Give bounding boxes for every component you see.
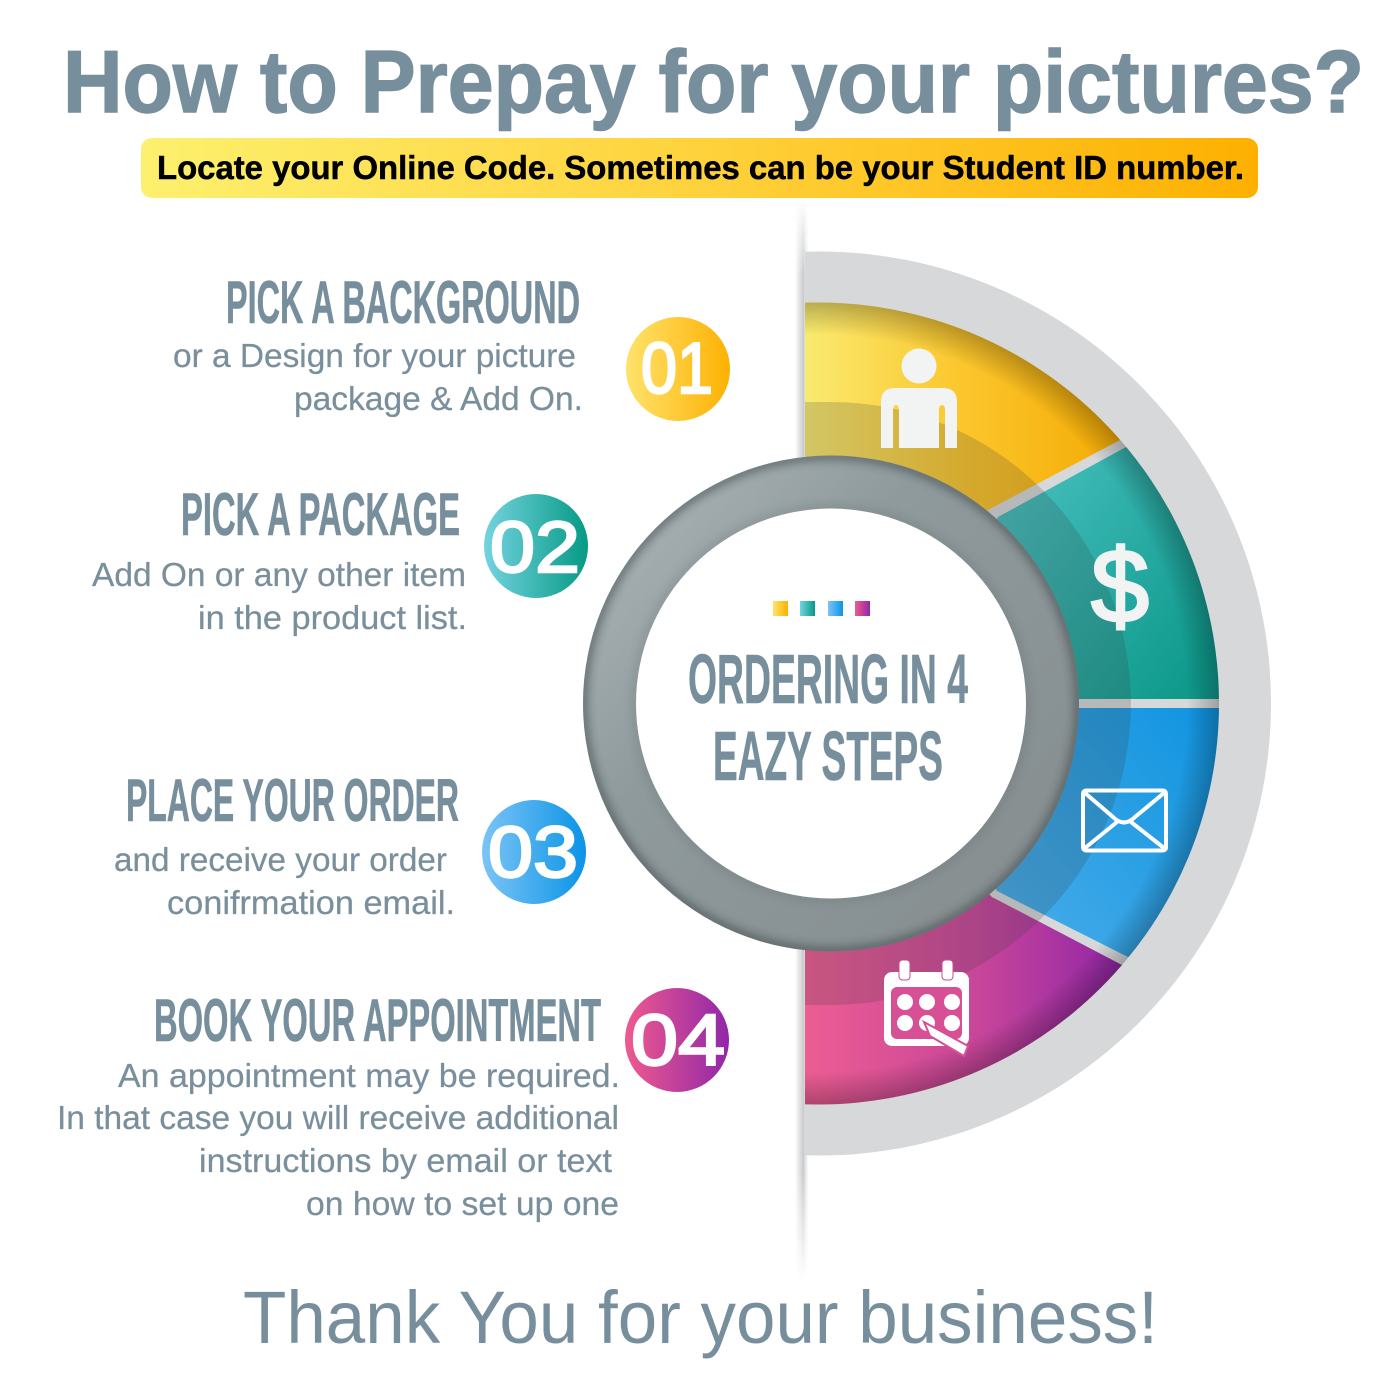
badge 04: 04 bbox=[631, 1001, 725, 1081]
step 4 text bbox=[57, 987, 620, 1222]
segment: teal bbox=[997, 447, 1219, 699]
step 3 text: conifrmation email. bbox=[167, 884, 455, 921]
center ring bbox=[583, 456, 1079, 952]
step 4 text: BOOK YOUR APPOINTMENT bbox=[154, 987, 601, 1054]
step 4 text: In that case you will receive additional bbox=[57, 1099, 619, 1136]
step 2 text: PICK A PACKAGE bbox=[181, 481, 460, 548]
step 3 text: and receive your order bbox=[114, 841, 447, 878]
segment: pink bbox=[805, 894, 1122, 1104]
divider wall bbox=[796, 212, 808, 1263]
step 2 text bbox=[92, 481, 467, 636]
badge 02 bbox=[484, 494, 588, 598]
step 2 text: Add On or any other item bbox=[92, 556, 466, 593]
step 1 text: package & Add On. bbox=[294, 380, 583, 417]
center heading bbox=[688, 640, 968, 795]
segments clipped to the coloured disc bbox=[805, 290, 1235, 1120]
step 4 text: instructions by email or text bbox=[199, 1142, 612, 1179]
badge 03: 03 bbox=[488, 813, 578, 893]
banner: locate your online code bbox=[141, 138, 1258, 198]
step 3 text bbox=[114, 767, 459, 921]
step 4 text: An appointment may be required. bbox=[118, 1057, 620, 1094]
step 1 text: PICK A BACKGROUND bbox=[226, 269, 580, 336]
inner darker band bbox=[805, 402, 1131, 1005]
outer gray band bbox=[805, 252, 1271, 1156]
rim shading bbox=[805, 290, 1235, 1120]
step 3 text: PLACE YOUR ORDER bbox=[126, 767, 459, 834]
step 1 text: or a Design for your picture bbox=[173, 337, 576, 374]
badge 01: 01 bbox=[641, 329, 713, 409]
step 4 text: on how to set up one bbox=[306, 1185, 619, 1222]
icon: envelope bbox=[1083, 790, 1166, 850]
segment: yellow bbox=[805, 302, 1120, 511]
icon: calendar with pencil bbox=[884, 960, 969, 1056]
badge 01 bbox=[626, 317, 730, 421]
center heading: ORDERING IN 4 bbox=[688, 640, 968, 718]
segment: blue bbox=[996, 708, 1219, 957]
banner: locate your online code: Locate your Online Code. Sometimes can be your Student ID number. bbox=[157, 149, 1244, 186]
badge 03 bbox=[482, 800, 586, 904]
step 2 text: in the product list. bbox=[198, 599, 467, 636]
half-circle diagram bbox=[805, 252, 1271, 1156]
step 1 text bbox=[173, 269, 583, 417]
badge 04 bbox=[625, 988, 729, 1092]
badge 02: 02 bbox=[490, 508, 580, 588]
color squares bbox=[773, 601, 870, 616]
footer: Thank You for your business! bbox=[243, 1276, 1158, 1359]
icon: dollar: $ bbox=[1091, 529, 1149, 645]
icon: person bbox=[881, 348, 957, 448]
center heading: EAZY STEPS bbox=[713, 717, 943, 795]
